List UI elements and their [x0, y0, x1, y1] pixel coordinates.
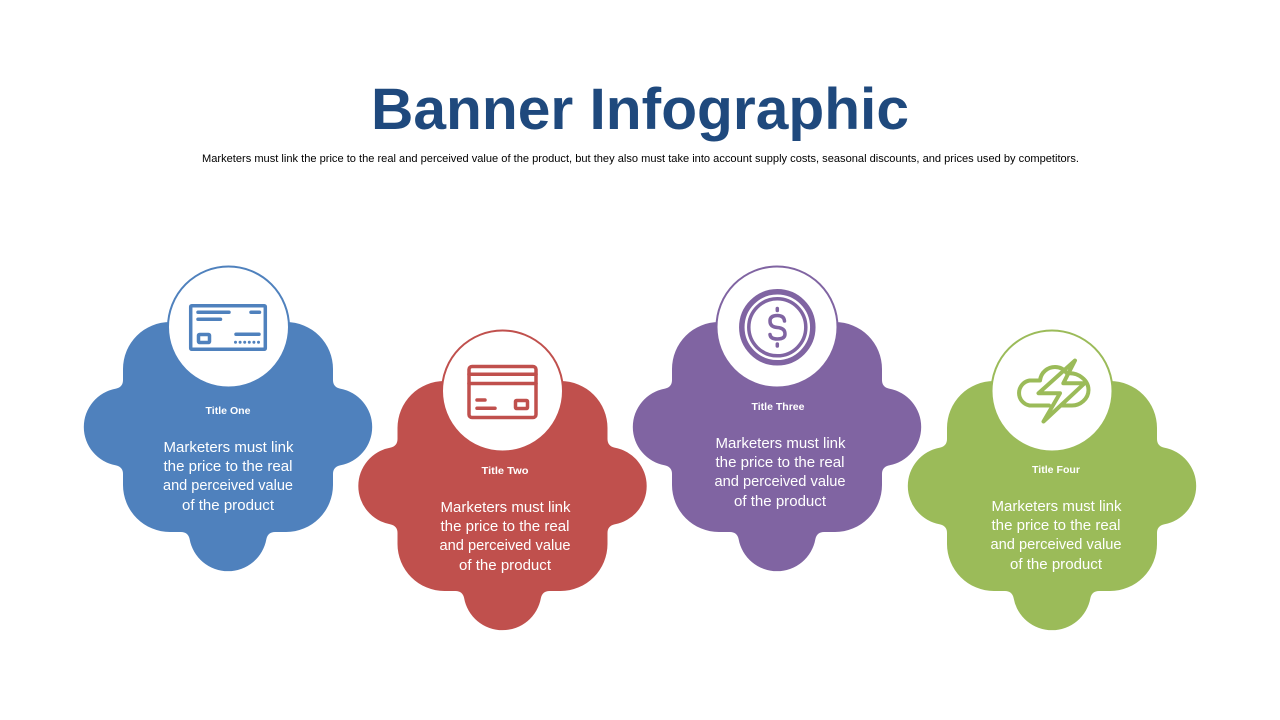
icon: storm cloud	[1019, 360, 1088, 422]
text block: title four: Marketers must link	[992, 499, 1122, 515]
panel: title four	[908, 330, 1196, 630]
text block: title three: the price to the real	[716, 455, 844, 471]
text block: title four: and perceived value	[990, 537, 1122, 553]
text block: title three: Marketers must link	[716, 436, 846, 452]
text block: title two	[440, 500, 571, 574]
text block: title four	[990, 499, 1122, 573]
green icon circle	[992, 330, 1112, 452]
text block: title two: of the product	[459, 558, 551, 574]
text block: title one: Marketers must link	[164, 440, 294, 456]
text block: title two: Marketers must link	[440, 500, 571, 516]
green banner shape	[908, 342, 1196, 630]
text block: title four: the price to the real	[992, 518, 1120, 534]
icon: credit card	[469, 366, 536, 418]
purple banner shape	[633, 283, 921, 571]
panel: title three	[633, 266, 921, 571]
text block: title two: the price to the real	[440, 519, 570, 535]
purple icon circle	[716, 266, 838, 388]
title: Banner Infographic	[371, 77, 909, 142]
heading: title two: Title Two	[482, 466, 528, 477]
text block: title three	[714, 436, 846, 510]
heading: title three: Title Three	[752, 402, 805, 413]
subtitle: Marketers must link the price to the real and perceived value of the product, but they also must take into account supply costs, seasonal discounts, and prices used by competitors.	[202, 153, 1079, 165]
text block: title three: of the product	[734, 494, 826, 510]
icon: bank cheque	[191, 306, 265, 349]
panel: title two	[358, 330, 647, 630]
text block: title one	[163, 440, 294, 514]
heading: title one: Title One	[206, 406, 251, 417]
text block: title four: of the product	[1010, 557, 1102, 573]
text block: title three: and perceived value	[714, 474, 846, 490]
icon: dollar coin	[742, 292, 813, 363]
red banner shape	[358, 342, 647, 630]
text block: title one: of the product	[182, 498, 274, 514]
text block: title one: and perceived value	[163, 478, 293, 494]
text block: title one: the price to the real	[164, 459, 292, 475]
blue banner shape	[84, 283, 372, 571]
red icon circle	[442, 330, 563, 452]
blue icon circle	[168, 266, 289, 388]
text block: title two: and perceived value	[440, 538, 570, 554]
heading: title four: Title Four	[1032, 465, 1080, 476]
panel: title one	[84, 266, 372, 571]
